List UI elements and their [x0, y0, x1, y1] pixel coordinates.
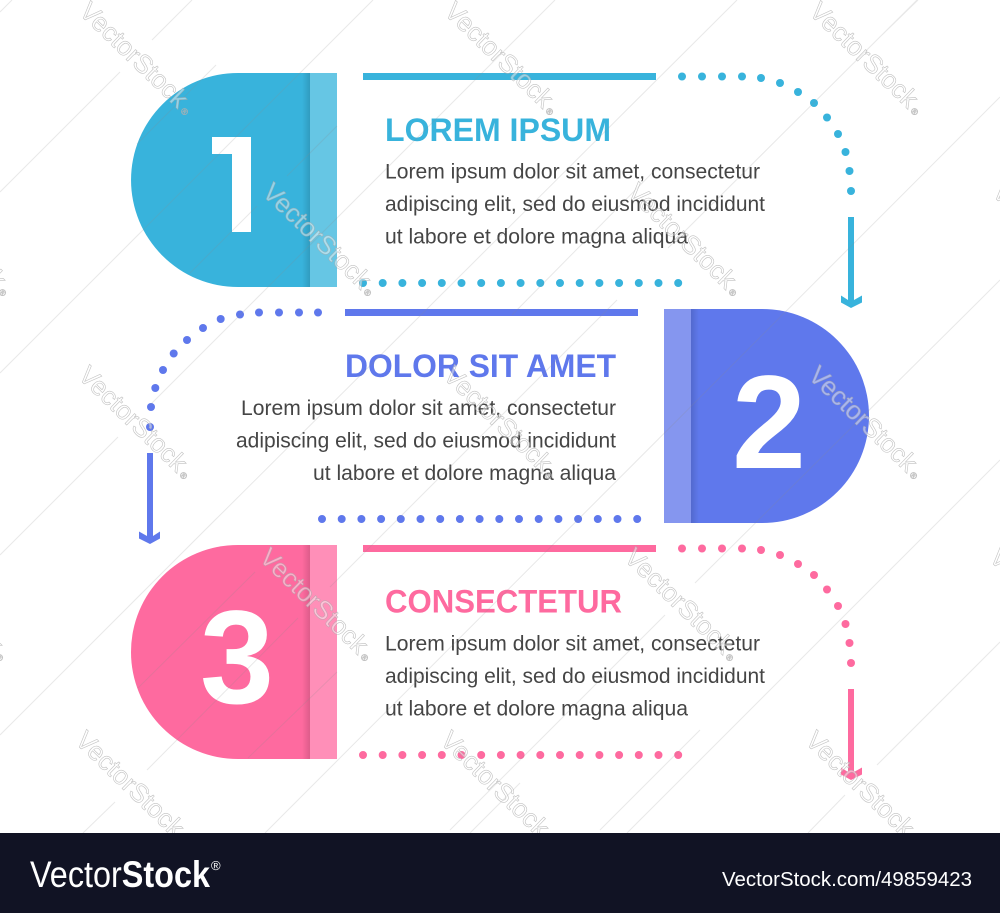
watermark overlay: VectorStock® — [800, 725, 928, 850]
footer bar — [0, 833, 1000, 913]
badge: step 1 — [131, 73, 337, 287]
watermark overlay: VectorStock® — [622, 177, 750, 302]
watermark overlay: VectorStock® — [254, 542, 382, 667]
top bar: step 3 — [363, 545, 656, 552]
panel: step 2 — [139, 308, 869, 544]
footer logo: VectorStock — [30, 854, 210, 895]
badge: step 3 — [131, 545, 337, 759]
text block: step 1: ut labore et dolore magna aliqua — [385, 226, 688, 248]
top bar: step 2 — [345, 309, 638, 316]
footer url: VectorStock.com/49859423 — [722, 869, 972, 891]
panel: step 3 — [131, 544, 862, 780]
heading: step 1: LOREM IPSUM — [385, 112, 611, 148]
watermark overlay: VectorStock® — [257, 177, 385, 302]
watermark overlay: VectorStock® — [803, 360, 931, 485]
arrow: step 3 end — [841, 689, 862, 780]
badge: step 1: 1 — [203, 113, 277, 261]
arrow: step 1 to step 2 — [841, 217, 862, 308]
dotted line: step 3 bottom — [363, 751, 680, 759]
text block: step 2: Lorem ipsum dolor sit amet, consectetur — [241, 397, 616, 420]
text block: step 1: adipiscing elit, sed do eiusmod incididunt — [385, 193, 765, 216]
dotted curve: step 1 — [678, 72, 855, 195]
heading: step 2: DOLOR SIT AMET — [345, 348, 616, 384]
dotted line: step 1 bottom — [363, 279, 680, 287]
watermark overlay: VectorStock® — [73, 360, 201, 485]
dotted curve: step 3 — [678, 544, 855, 667]
watermark overlay: VectorStock® — [619, 542, 747, 667]
badge: step 3: 3 — [200, 584, 274, 732]
heading: step 3: CONSECTETUR — [385, 584, 622, 620]
watermark overlay: VectorStock® — [435, 725, 563, 850]
text block: step 3: ut labore et dolore magna aliqua — [385, 698, 688, 720]
badge: step 2 — [664, 309, 869, 523]
dotted curve: step 2 — [146, 308, 322, 431]
text block: step 3: adipiscing elit, sed do eiusmod incididunt — [385, 665, 765, 688]
top bar: step 1 — [363, 73, 656, 80]
panel: step 1 — [131, 72, 862, 308]
text block: step 1: Lorem ipsum dolor sit amet, consectetur — [385, 160, 760, 184]
arrow: step 2 to step 3 — [139, 453, 160, 544]
footer registered mark: ® — [211, 858, 221, 873]
text block: step 1 — [385, 160, 765, 248]
dotted line: step 2 bottom — [322, 515, 640, 523]
text block: step 2 — [236, 397, 616, 485]
text block: step 3 — [385, 632, 765, 720]
text block: step 2: adipiscing elit, sed do eiusmod incididunt — [236, 430, 616, 452]
watermark overlay: VectorStock® — [438, 360, 566, 485]
badge: step 2: 2 — [732, 349, 806, 497]
text block: step 3: Lorem ipsum dolor sit amet, consectetur — [385, 632, 760, 656]
watermark overlay: VectorStock® — [70, 725, 198, 850]
text block: step 2: ut labore et dolore magna aliqua — [313, 462, 616, 485]
